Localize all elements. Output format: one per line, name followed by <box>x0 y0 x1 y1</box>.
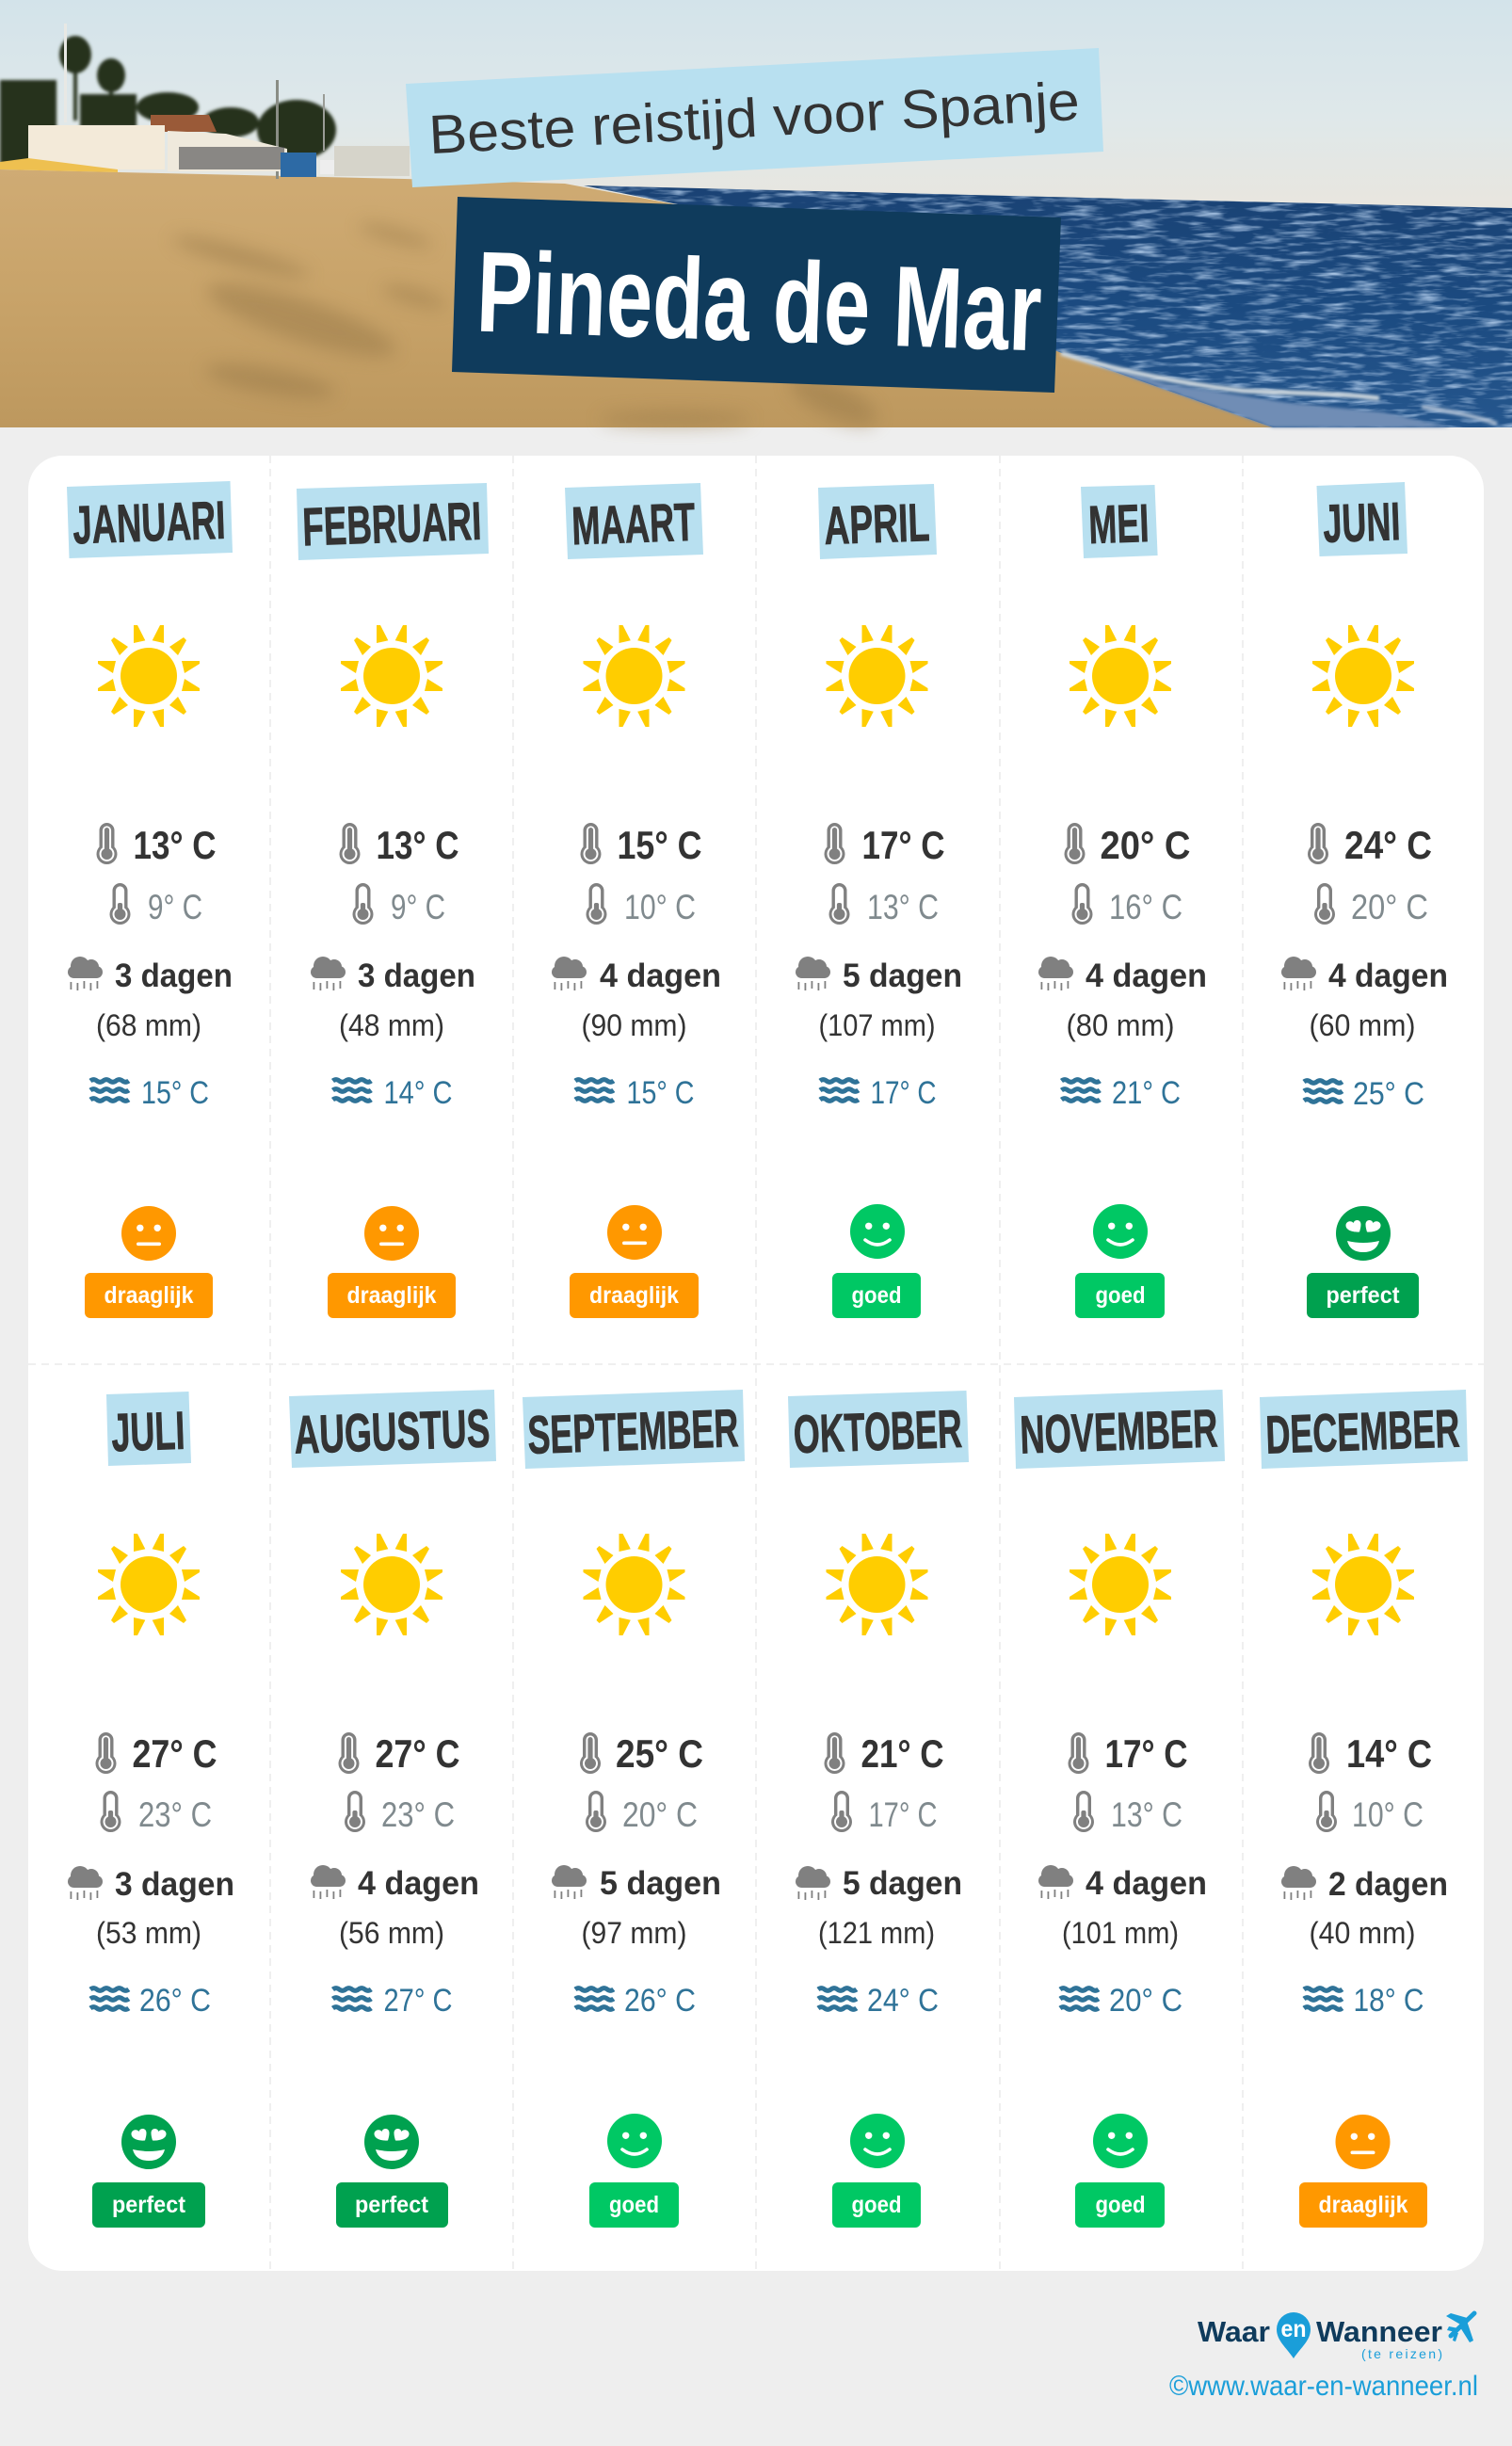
subtitle banner <box>406 48 1103 187</box>
rating: perfect <box>336 2115 448 2228</box>
icon: sun <box>98 625 200 727</box>
rain days: 4 dagen <box>600 957 721 994</box>
title banner: Pineda de Mar <box>475 228 1044 375</box>
low temperature: 20° C <box>622 1795 698 1834</box>
high temperature: 13° C <box>377 823 459 867</box>
sea temperature: 15° C <box>141 1075 209 1111</box>
panel: januari <box>67 481 233 1318</box>
low temperature <box>1316 1791 1424 1834</box>
icon: sun <box>1312 625 1414 727</box>
heading: oktober: OKTOBER <box>793 1399 963 1465</box>
rating: draaglijk <box>328 1206 456 1318</box>
rainfall: (121 mm) <box>818 1916 935 1950</box>
rainfall: (68 mm) <box>96 1008 201 1042</box>
heading: maart: MAART <box>571 492 697 556</box>
panel: juni <box>1281 482 1448 1318</box>
high temperature: 21° C <box>861 1731 943 1776</box>
heading: september <box>523 1390 745 1469</box>
rain days: 4 dagen <box>358 1865 479 1902</box>
rain days: 4 dagen <box>1086 1865 1207 1902</box>
low temperature: 20° C <box>1351 888 1428 926</box>
sea temperature <box>1060 1983 1182 2019</box>
icon: sun <box>341 1534 442 1635</box>
logo: Waar en Wanneer: Waar <box>1198 2315 1270 2348</box>
low temperature: 16° C <box>1109 888 1182 926</box>
rainfall: (107 mm) <box>819 1008 936 1042</box>
low temperature: 10° C <box>624 888 696 926</box>
rating: goed <box>1075 2114 1165 2228</box>
high temperature <box>96 1731 217 1776</box>
heading: november <box>1014 1390 1225 1469</box>
low temperature <box>352 883 445 926</box>
rain days: 5 dagen <box>843 957 962 994</box>
low temperature <box>831 1791 938 1834</box>
heading: april <box>818 484 937 559</box>
rain days <box>68 1866 234 1903</box>
high temperature <box>339 823 459 867</box>
rating: goed: goed <box>1096 1282 1145 1309</box>
high temperature: 14° C <box>1346 1731 1432 1776</box>
high temperature: 15° C <box>618 823 702 867</box>
sea temperature <box>90 1983 211 2019</box>
logo: Waar en Wanneer: Wanneer <box>1316 2315 1442 2348</box>
panel: augustus <box>289 1390 496 2228</box>
sea temperature: 24° C <box>867 1983 939 2019</box>
rating: goed: goed <box>1096 2192 1145 2218</box>
rain days <box>1281 957 1448 994</box>
rain days: 5 dagen <box>600 1865 721 1902</box>
sea temperature: 26° C <box>139 1983 211 2019</box>
rain days: 3 dagen <box>115 1866 234 1903</box>
rating: goed: goed <box>851 2192 902 2218</box>
panel: mei <box>1038 485 1207 1318</box>
icon: sun <box>827 625 928 727</box>
rating: goed <box>589 2114 679 2228</box>
logo: Waar en Wanneer: en <box>1280 2316 1307 2342</box>
rainfall: (101 mm) <box>1062 1916 1179 1950</box>
heading: januari <box>67 481 233 558</box>
sea temperature: 25° C <box>1353 1076 1424 1112</box>
high temperature <box>825 823 945 867</box>
panel: climate table card <box>28 456 1484 2271</box>
heading: september: SEPTEMBER <box>526 1398 739 1466</box>
high temperature: 20° C <box>1100 823 1190 867</box>
high temperature <box>339 1731 459 1776</box>
rating: perfect: perfect <box>112 2192 186 2218</box>
rating: goed <box>832 2114 921 2228</box>
high temperature: 17° C <box>1105 1731 1188 1776</box>
rainfall: (56 mm) <box>339 1916 444 1950</box>
sea temperature: 18° C <box>1354 1983 1424 2019</box>
high temperature: 17° C <box>862 823 945 867</box>
rainfall: (90 mm) <box>582 1008 687 1042</box>
rain days <box>1038 957 1207 994</box>
panel: november <box>1014 1390 1225 2228</box>
heading: januari: JANUARI <box>72 491 226 555</box>
icon: sun <box>1070 625 1171 727</box>
sea temperature: 14° C <box>384 1075 452 1111</box>
rating: perfect <box>1307 1206 1419 1318</box>
panel: september <box>523 1390 745 2228</box>
rating: perfect: perfect <box>1326 1282 1400 1309</box>
high temperature <box>96 823 217 867</box>
panel: februari <box>297 483 489 1318</box>
heading: maart <box>565 483 703 559</box>
rating: draaglijk <box>1299 2115 1427 2228</box>
high temperature: 24° C <box>1344 823 1432 867</box>
sea temperature <box>90 1075 209 1111</box>
sea temperature <box>1304 1983 1424 2019</box>
icon: sun <box>584 625 685 727</box>
title banner <box>452 197 1061 393</box>
rain days: 3 dagen <box>115 957 233 994</box>
website url: ©www.waar-en-wanneer.nl <box>1169 2371 1478 2402</box>
logo: Waar en Wanneer <box>1198 2312 1474 2361</box>
panel: oktober <box>788 1391 969 2228</box>
low temperature: 23° C <box>381 1795 455 1834</box>
sea temperature: 17° C <box>870 1075 936 1111</box>
subtitle banner: Beste reistijd voor Spanje <box>427 71 1081 166</box>
low temperature <box>345 1791 455 1834</box>
sea temperature <box>333 1983 452 2019</box>
high temperature <box>1309 1731 1432 1776</box>
rainfall: (80 mm) <box>1066 1008 1175 1042</box>
rainfall: (60 mm) <box>1309 1008 1416 1042</box>
rain days <box>68 957 233 994</box>
heading: februari: FEBRUARI <box>301 491 482 557</box>
sea temperature <box>575 1983 696 2019</box>
sea temperature <box>820 1075 936 1111</box>
sea temperature <box>1304 1076 1424 1112</box>
high temperature: 27° C <box>132 1731 217 1776</box>
heading: augustus <box>289 1390 496 1468</box>
sea temperature: 15° C <box>627 1075 695 1111</box>
panel: juli <box>68 1392 234 2228</box>
panel: april <box>796 484 962 1318</box>
sea temperature: 26° C <box>624 1983 696 2019</box>
heading: augustus: AUGUSTUS <box>293 1398 491 1466</box>
low temperature <box>1073 1791 1182 1834</box>
heading: juni <box>1316 482 1407 556</box>
rating: perfect <box>92 2115 205 2228</box>
rating: goed: goed <box>609 2192 659 2218</box>
low temperature <box>109 883 202 926</box>
heading: mei: MEI <box>1087 493 1150 555</box>
panel: december <box>1260 1390 1468 2228</box>
low temperature <box>1314 883 1428 926</box>
rainfall: (97 mm) <box>582 1916 687 1950</box>
high temperature <box>1064 823 1190 867</box>
rating: draaglijk: draaglijk <box>346 1282 437 1309</box>
heading: november: NOVEMBER <box>1019 1398 1218 1466</box>
sea temperature: 21° C <box>1112 1075 1181 1111</box>
low temperature: 10° C <box>1352 1795 1424 1834</box>
icon: sun <box>1070 1534 1171 1635</box>
sea temperature <box>575 1075 695 1111</box>
low temperature: 17° C <box>868 1795 938 1834</box>
sea temperature: 27° C <box>384 1983 452 2019</box>
sea temperature <box>333 1075 452 1111</box>
rain days: 4 dagen <box>1086 957 1207 994</box>
rating: goed <box>832 1204 921 1318</box>
rain days <box>311 957 475 994</box>
low temperature <box>100 1791 212 1834</box>
header beach photo <box>0 0 1512 435</box>
rating: goed <box>1075 1204 1165 1318</box>
rating: draaglijk: draaglijk <box>589 1282 679 1309</box>
logo: Waar en Wanneer: (te reizen) <box>1361 2346 1442 2361</box>
icon: sun <box>98 1534 200 1635</box>
high temperature: 27° C <box>375 1731 459 1776</box>
panel: maart <box>552 483 721 1318</box>
rainfall: (53 mm) <box>96 1916 201 1950</box>
low temperature: 13° C <box>867 888 939 926</box>
rain days: 2 dagen <box>1328 1866 1448 1903</box>
rain days <box>796 957 962 994</box>
heading: juli <box>106 1392 191 1466</box>
icon: sun <box>341 625 442 727</box>
icon: sun <box>1312 1534 1414 1635</box>
heading: februari <box>297 483 489 560</box>
low temperature: 9° C <box>391 888 445 926</box>
high temperature: 25° C <box>616 1731 703 1776</box>
rainfall: (40 mm) <box>1309 1916 1416 1950</box>
low temperature <box>586 883 696 926</box>
rain days <box>552 957 721 994</box>
rating: draaglijk: draaglijk <box>1318 2192 1408 2218</box>
heading: mei <box>1081 485 1158 558</box>
rating: perfect: perfect <box>355 2192 429 2218</box>
rating: goed: goed <box>851 1282 902 1309</box>
icon: sun <box>584 1534 685 1635</box>
sea temperature <box>818 1983 939 2019</box>
low temperature <box>828 883 939 926</box>
icon: sun <box>827 1534 928 1635</box>
sea temperature: 20° C <box>1109 1983 1182 2019</box>
rain days: 4 dagen <box>1328 957 1448 994</box>
low temperature <box>1071 883 1182 926</box>
heading: april: APRIL <box>823 492 930 556</box>
rating: draaglijk: draaglijk <box>104 1282 194 1309</box>
rain days: 3 dagen <box>358 957 475 994</box>
rating: draaglijk <box>570 1205 699 1318</box>
high temperature: 13° C <box>134 823 217 867</box>
low temperature <box>586 1791 698 1834</box>
sea temperature <box>1062 1075 1181 1111</box>
high temperature <box>1068 1731 1188 1776</box>
rain days <box>1281 1866 1448 1903</box>
low temperature: 9° C <box>148 888 202 926</box>
rating: draaglijk <box>85 1206 213 1318</box>
rain days <box>796 1865 962 1902</box>
low temperature: 23° C <box>138 1795 212 1834</box>
heading: juni: JUNI <box>1322 491 1401 555</box>
low temperature: 13° C <box>1111 1795 1182 1834</box>
high temperature <box>825 1731 943 1776</box>
high temperature <box>580 1731 703 1776</box>
high temperature <box>580 823 702 867</box>
heading: oktober <box>788 1391 969 1468</box>
high temperature <box>1308 823 1432 867</box>
rainfall: (48 mm) <box>339 1008 444 1042</box>
heading: juli: JULI <box>110 1401 185 1463</box>
rain days: 5 dagen <box>843 1865 962 1902</box>
